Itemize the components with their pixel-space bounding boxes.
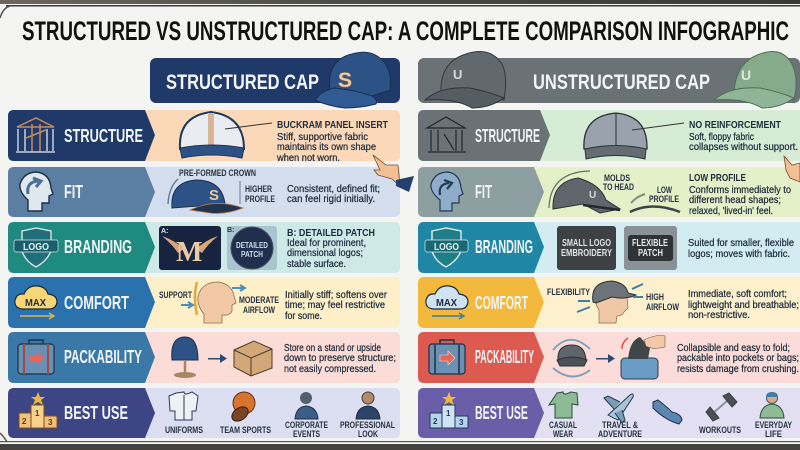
panel: unstructured comfort <box>418 277 800 328</box>
icon: pre-formed cap: S <box>209 187 219 204</box>
arrow <box>596 354 615 363</box>
labels: fit <box>603 173 679 204</box>
tile: detailed patch: PATCH <box>241 250 263 259</box>
labels: comfort: MODERATE <box>239 295 279 305</box>
labels: fit: HIGHER <box>245 184 273 194</box>
icon: navy cap with S <box>315 52 390 108</box>
icon: pointing hand left <box>373 155 414 192</box>
panel: structured best use <box>8 388 400 439</box>
labels: fit: LOW <box>657 185 673 195</box>
tile: flexible patch: PATCH <box>638 248 663 259</box>
tile: detailed patch <box>227 226 277 270</box>
panel: unstructured packability <box>418 332 800 383</box>
icon: t-shirt <box>549 392 578 418</box>
icon: pre-formed cap <box>168 179 243 213</box>
body text: down to preserve structure; <box>284 352 396 364</box>
icon: podium: 2 <box>22 417 27 426</box>
icon: cap with buckram insert <box>180 112 272 158</box>
icon: suitcase <box>429 340 465 374</box>
icon: green cap with U <box>714 52 796 108</box>
labels: fit: PRE-FORMED CROWN <box>179 168 256 178</box>
icon: corporate person <box>295 392 318 419</box>
icon: cap on stand <box>172 337 198 378</box>
callout text <box>276 119 388 164</box>
icon: soft grey cap <box>584 113 684 159</box>
tile: small logo embroidery: EMBROIDERY <box>561 248 612 259</box>
header: unstructured cap <box>418 52 800 108</box>
labels: comfort: FLEXIBILITY <box>547 287 590 297</box>
icon: head with cap and airflow <box>577 281 643 323</box>
icon: logo shield <box>425 228 468 267</box>
panel: unstructured fit <box>418 167 800 217</box>
icon: airplane <box>604 394 633 423</box>
icon: grey cap with U <box>425 52 506 108</box>
body text: Store on a stand or upside <box>284 342 381 354</box>
icon: podium: 3 <box>459 418 464 427</box>
labels: best use <box>549 420 792 439</box>
label: BEST USE <box>475 403 528 423</box>
panel: unstructured branding <box>418 222 800 273</box>
labels: best use <box>165 420 395 439</box>
callout text: Soft, floppy fabric <box>689 131 754 143</box>
panel: structured comfort <box>8 277 400 328</box>
arrow <box>208 354 227 363</box>
body text <box>287 183 380 205</box>
labels: comfort: AIRFLOW <box>646 302 680 312</box>
body text: dimensional logos; <box>287 247 363 259</box>
labels: fit <box>179 168 275 204</box>
label: BRANDING <box>64 237 132 257</box>
labels: best use: LOOK <box>358 429 379 439</box>
icon: navy cap with S: S <box>338 69 352 92</box>
labels: best use: UNIFORMS <box>165 425 203 435</box>
body text: B: DETAILED PATCH <box>287 227 375 239</box>
labels: best use: LIFE <box>765 429 782 439</box>
icon: head with arrow <box>431 172 463 211</box>
icon: head with arrow <box>20 172 53 211</box>
icon: folding cap <box>553 340 590 377</box>
labels: best use: TRAVEL & <box>602 420 639 430</box>
body text: for some. <box>285 310 322 322</box>
icon: frame building <box>16 118 55 152</box>
body text: different head shapes; <box>689 194 781 206</box>
callout text <box>689 119 798 153</box>
body text: can feel rigid initially. <box>287 193 375 205</box>
body text: non-restrictive. <box>688 309 750 321</box>
labels: best use: CORPORATE <box>285 420 328 430</box>
label: COMFORT <box>475 293 528 313</box>
body text <box>688 288 799 321</box>
tile: small logo embroidery: SMALL LOGO <box>562 238 611 249</box>
body text <box>688 237 794 260</box>
labels: comfort: HIGH <box>646 292 664 302</box>
labels: best use: TEAM SPORTS <box>220 425 271 435</box>
label: PACKABILITY <box>64 347 142 367</box>
label: FIT <box>64 182 83 202</box>
icon: cap into bag <box>621 336 665 379</box>
icon: cardboard box <box>234 341 272 376</box>
icon: podium <box>19 392 57 428</box>
labels: best use: WEAR <box>553 429 573 439</box>
tile: winged M logo: A: <box>161 228 168 235</box>
icon: grey cap with U: U <box>453 67 462 82</box>
labels: fit: TO HEAD <box>603 182 634 192</box>
body text <box>677 342 799 375</box>
icon: podium: 2 <box>433 417 438 426</box>
icon: collapsed building <box>427 117 466 152</box>
header: unstructured cap: UNSTRUCTURED CAP <box>533 71 710 94</box>
body text: time; may feel restrictive <box>285 299 385 311</box>
tile: flexible patch: FLEXIBLE <box>632 238 668 249</box>
icon: head with support band <box>181 282 245 323</box>
body text: stable surface. <box>287 258 346 270</box>
header: structured cap: STRUCTURED CAP <box>166 71 319 94</box>
body text: LOW PROFILE <box>689 172 746 184</box>
body text <box>284 342 396 375</box>
labels: best use: WORKOUTS <box>699 425 741 435</box>
header: structured cap <box>150 52 400 108</box>
body text: Ideal for prominent, <box>287 237 366 249</box>
body text <box>287 227 375 270</box>
callout text: Stiff, supportive fabric <box>277 131 368 143</box>
labels: comfort: AIRFLOW <box>243 305 276 315</box>
body text: Initially stiff; softens over <box>285 289 387 301</box>
icon: max cloud: MAX <box>436 298 457 309</box>
labels: fit: PROFILE <box>649 194 679 204</box>
callout text: maintains its own shape <box>277 141 376 153</box>
icon: soft cap and low profile brim <box>549 171 680 213</box>
tile: detailed patch: B: <box>227 227 234 234</box>
tile: small logo embroidery <box>557 226 616 270</box>
labels: fit: MOLDS <box>604 173 630 183</box>
body text: relaxed, 'lived-in' feel. <box>689 205 773 217</box>
body text: Immediate, soft comfort; <box>688 288 787 300</box>
icon: balls <box>229 392 255 424</box>
icon: podium: 1 <box>35 409 40 418</box>
icon: max cloud: MAX <box>25 298 46 309</box>
icon: pointing hand right <box>784 156 800 182</box>
label: FIT <box>475 182 492 202</box>
tile: detailed patch: DETAILED <box>236 241 268 250</box>
tile: winged M logo <box>159 226 221 270</box>
tile: winged M logo: M <box>176 237 202 268</box>
label: STRUCTURE <box>64 126 143 146</box>
panel: unstructured structure <box>418 110 800 161</box>
labels: best use: EVENTS <box>293 429 320 439</box>
panel: structured packability <box>8 332 400 383</box>
labels: best use: ADVENTURE <box>598 429 642 439</box>
labels: fit: PROFILE <box>245 194 275 204</box>
icon: suitcase <box>18 340 54 374</box>
label: COMFORT <box>64 293 129 313</box>
body text: not easily compressed. <box>284 363 376 375</box>
labels: best use: PROFESSIONAL <box>340 420 395 430</box>
icon: soft cap and low profile brim: U <box>589 190 596 201</box>
icon: jersey <box>169 392 198 420</box>
icon: logo shield: LOGO <box>434 241 459 253</box>
icon: everyday person <box>760 392 784 418</box>
label: STRUCTURE <box>475 126 540 146</box>
icon: podium: 1 <box>446 409 451 418</box>
icon: sneaker <box>653 400 682 424</box>
icon: dumbbell <box>706 393 737 421</box>
icon: podium <box>430 392 468 428</box>
callout text: when not worn. <box>276 152 340 164</box>
body text <box>689 172 791 217</box>
icon: max cloud <box>15 286 57 319</box>
labels: comfort <box>159 290 279 315</box>
label: BEST USE <box>64 403 128 423</box>
callout text: BUCKRAM PANEL INSERT <box>277 119 388 131</box>
panel: structured fit <box>8 167 400 217</box>
labels: comfort: SUPPORT <box>159 290 192 300</box>
body text: Consistent, defined fit; <box>287 183 380 195</box>
body text: logos; moves with fabric. <box>688 248 790 260</box>
panel: structured branding <box>8 222 400 273</box>
panel: structured structure <box>8 110 400 164</box>
panel: unstructured packability: PACKABILITY <box>475 347 534 367</box>
callout text: NO REINFORCEMENT <box>689 119 781 131</box>
icon: podium: 3 <box>48 418 53 427</box>
icon: logo shield: LOGO <box>23 241 49 253</box>
tile: flexible patch <box>624 226 677 270</box>
icon: logo shield <box>14 228 58 267</box>
labels: comfort <box>547 287 680 312</box>
icon: professional person <box>356 392 380 419</box>
icon: green cap with U: U <box>741 67 751 83</box>
label: BRANDING <box>475 237 533 257</box>
panel: unstructured best use <box>418 388 800 439</box>
labels: best use: CASUAL <box>549 420 577 430</box>
icon: max cloud <box>426 286 468 319</box>
body text <box>285 289 387 322</box>
